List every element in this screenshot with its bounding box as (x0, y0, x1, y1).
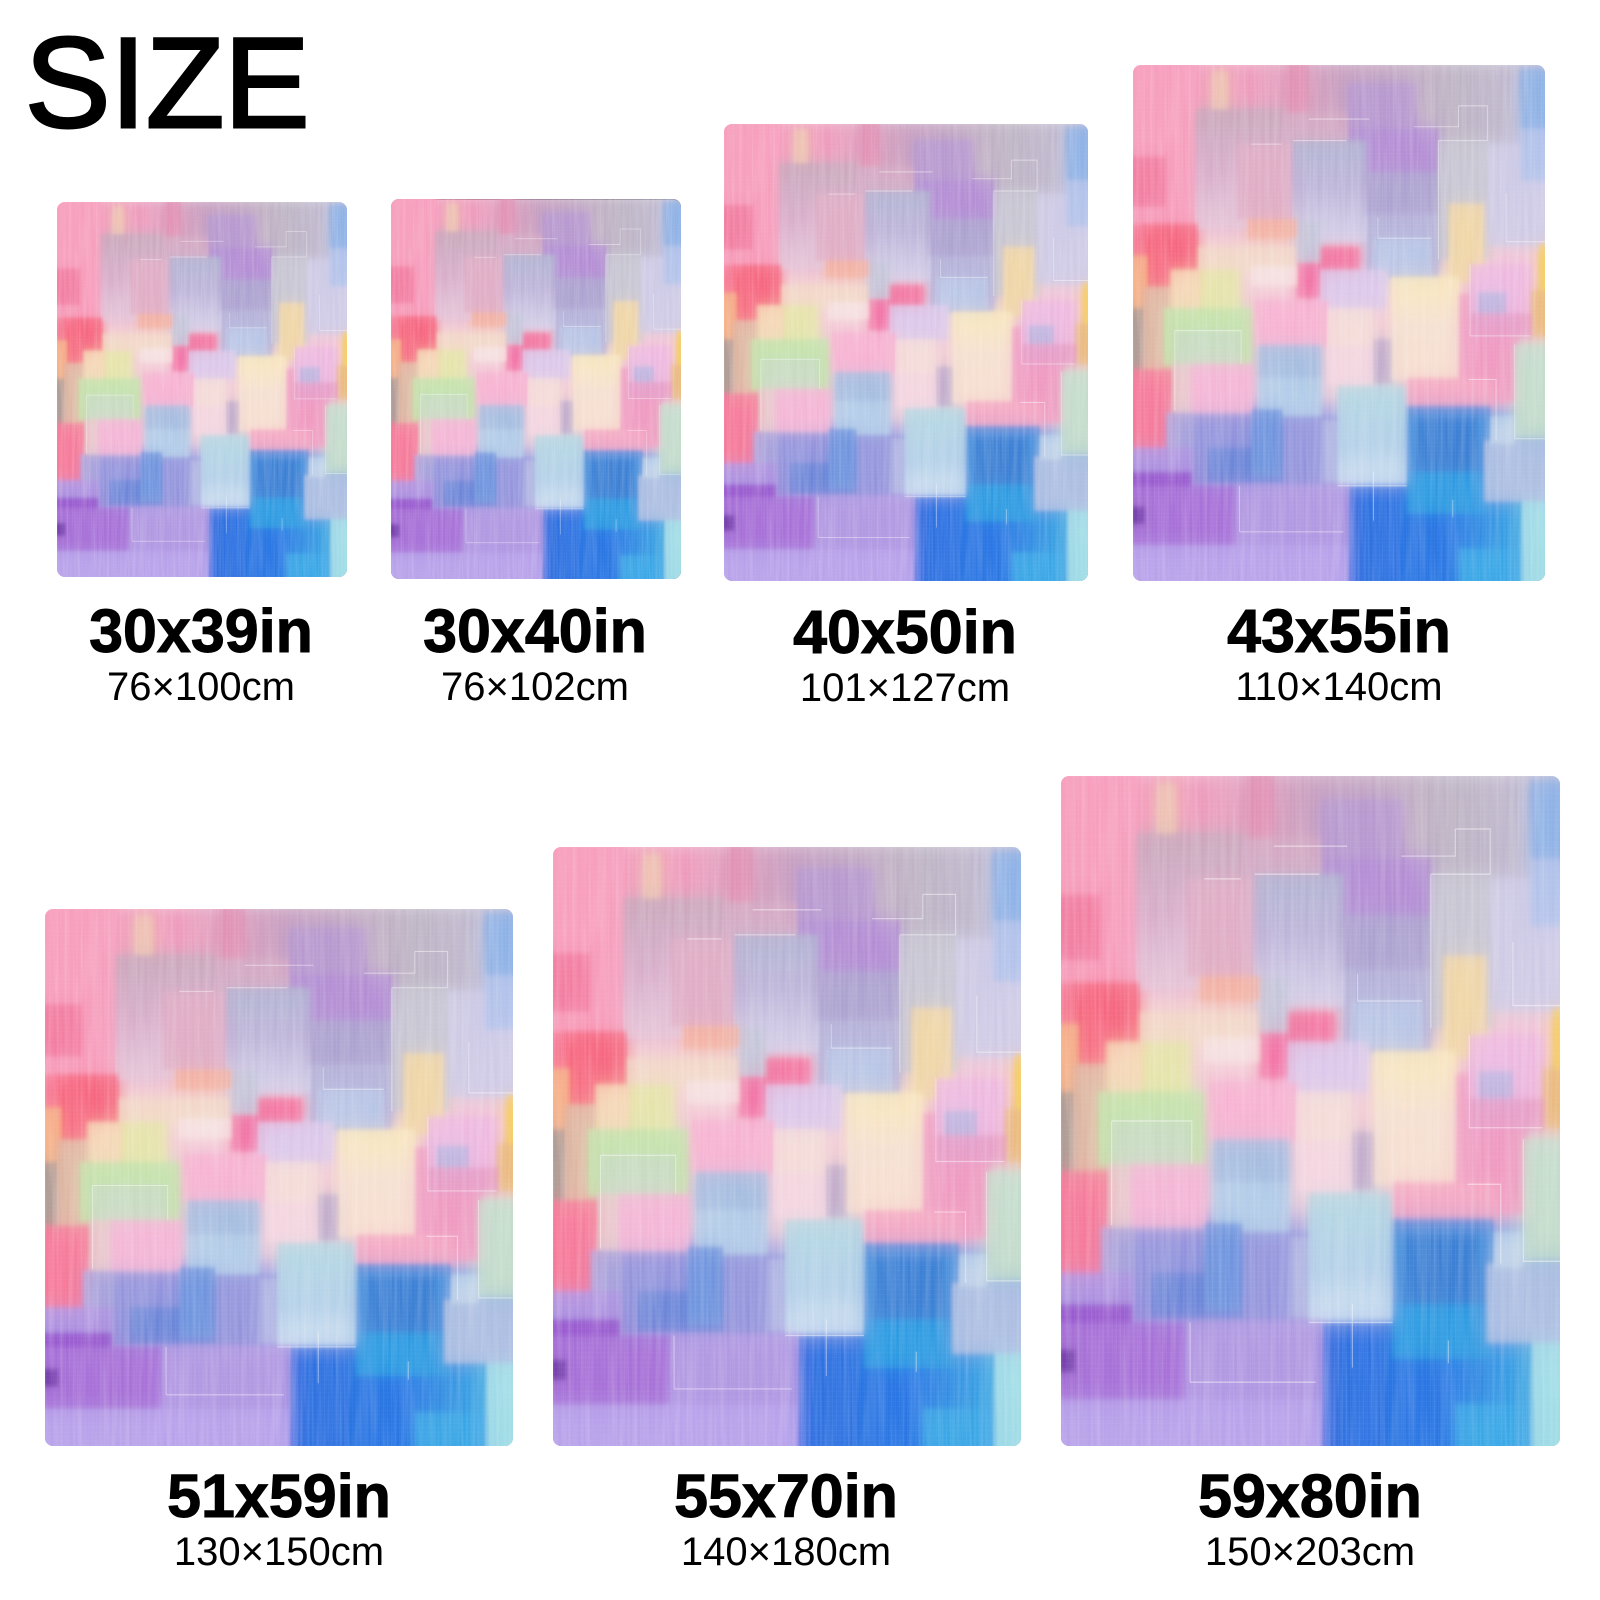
size label: 40x50in (793, 598, 1017, 710)
title: SIZE (25, 12, 310, 155)
size label: 30x39in (89, 597, 313, 709)
size label: 30x40in (423, 597, 647, 709)
size label: 43x55in: 110×140cm (1235, 665, 1443, 709)
size label: 55x70in: 140×180cm (681, 1530, 891, 1574)
poster image: 30x40in (391, 199, 681, 579)
size label: 40x50in: 101×127cm (800, 666, 1010, 710)
poster image: 30x39in (57, 202, 347, 577)
poster image: 40x50in (724, 124, 1088, 581)
size label: 59x80in (1198, 1462, 1422, 1574)
size label: 40x50in: 40x50in (793, 598, 1017, 666)
size label: 30x40in: 76×102cm (441, 665, 629, 709)
poster image: 43x55in (1133, 65, 1545, 581)
size label: 30x39in: 30x39in (89, 597, 313, 665)
size label: 59x80in: 59x80in (1198, 1462, 1422, 1530)
size label: 51x59in: 51x59in (167, 1462, 391, 1530)
size label: 30x40in: 30x40in (423, 597, 647, 665)
poster image: 59x80in (1061, 776, 1560, 1446)
size label: 43x55in: 43x55in (1227, 597, 1451, 665)
poster image: 55x70in (553, 847, 1021, 1446)
size label: 51x59in: 130×150cm (174, 1530, 384, 1574)
size label: 43x55in (1227, 597, 1451, 709)
size label: 51x59in (167, 1462, 391, 1574)
size label: 55x70in (674, 1462, 898, 1574)
poster image: 51x59in (45, 909, 513, 1446)
size label: 55x70in: 55x70in (674, 1462, 898, 1530)
size label: 30x39in: 76×100cm (107, 665, 295, 709)
size label: 59x80in: 150×203cm (1205, 1530, 1415, 1574)
